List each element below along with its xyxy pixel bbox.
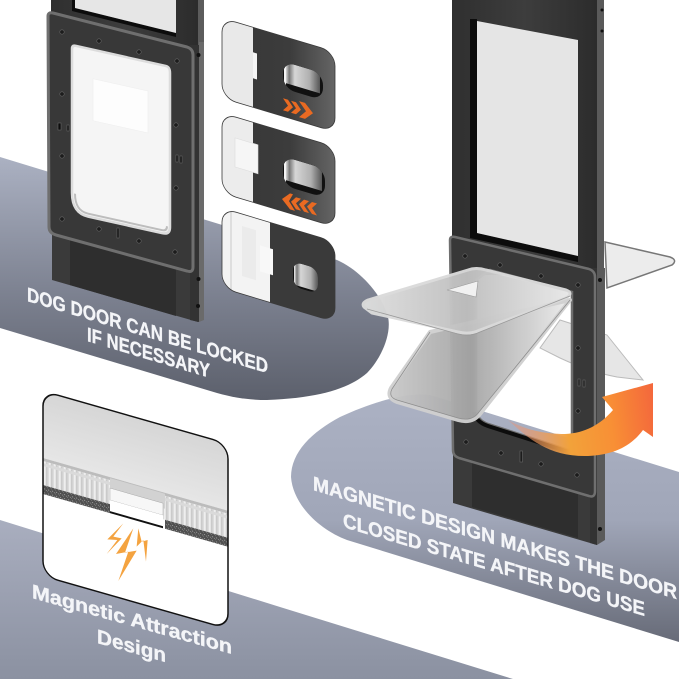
caption: magnetic design: CLOSED STATE AFTER DOG USE [343,510,645,621]
background band: right [291,395,679,642]
back flap upper [605,242,675,288]
background band: top left [0,157,389,400]
icon: lightning bolts [107,523,148,581]
lower clear flap [389,300,570,421]
flap handle [447,281,478,297]
magnetic attraction detail panel [43,391,228,629]
left door unit [48,0,204,322]
upper rail [51,0,204,60]
right door unit [363,0,675,545]
caption: dog door can be locked: IF NECESSARY [87,323,210,383]
lower rail [453,268,605,545]
clear door flap [72,45,170,235]
slider knob [283,159,325,195]
orange arrows right [283,96,313,121]
caption: magnetic attraction design: Design [97,626,166,667]
screw holes [463,254,585,477]
slider knob [283,64,323,98]
caption: magnetic attraction design: Magnetic Attraction [32,581,232,659]
magnetic clasp [110,478,165,529]
back flap lower [540,320,643,380]
screw holes [58,30,182,254]
upper clear flap [363,268,570,335]
detail panel: lock close-up [222,208,335,322]
orange arrow [508,383,653,456]
background band: bottom left [0,520,513,679]
mounting plate [48,13,193,272]
caption: dog door can be locked: DOG DOOR CAN BE LOCKED [27,283,268,378]
upper rail [452,0,604,275]
slider knob [293,264,318,292]
mounting plate with opening [450,237,595,496]
lower rail [52,42,204,322]
black channel of the opening [474,412,573,452]
detail panel: slider locked [222,113,335,227]
detail panel: slider unlocked [222,18,335,132]
orange arrows left [282,191,317,218]
